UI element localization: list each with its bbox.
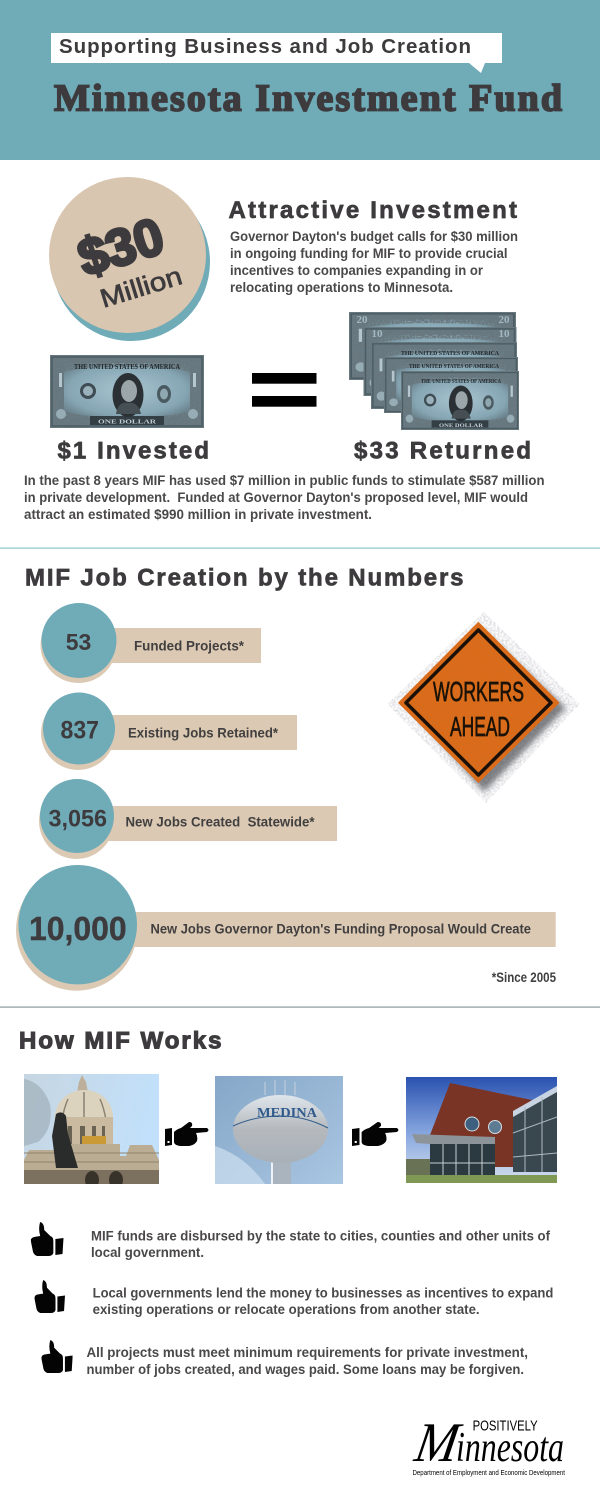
text block: budget call: in ongoing funding for MIF to provide crucial <box>230 245 508 261</box>
header banner <box>0 0 600 160</box>
text block: past 8 years: In the past 8 years MIF has used $7 million in public funds to stimulate $587 million <box>24 472 544 488</box>
icon: thumbs up 2 <box>34 1280 65 1313</box>
text block: step 3: number of jobs created, and wages paid. Some loans may be forgiven. <box>86 1361 524 1377</box>
heading: attractive investment: Attractive Investment <box>228 197 517 224</box>
stat: 837 jobs retained: 837 <box>60 716 99 744</box>
photo: state capitol <box>24 1074 159 1184</box>
text block: step 3 <box>86 1344 528 1377</box>
text block: step 1: local government. <box>91 1244 204 1260</box>
photo: business building <box>406 1077 557 1183</box>
arrow: pointing hand to capitol <box>165 1122 208 1146</box>
stat: 837 jobs retained <box>41 692 297 770</box>
stat: 3,056 new jobs: New Jobs Created Statewide* <box>126 814 315 830</box>
icon: single dollar bill: ONE DOLLAR <box>98 420 157 426</box>
text block: budget call: relocating operations to Minnesota. <box>230 279 453 295</box>
text block: step 1 <box>91 1228 550 1260</box>
heading: job creation: MIF Job Creation by the Numbers <box>25 564 464 592</box>
icon: workers ahead road sign: AHEAD <box>450 711 510 742</box>
stat: 53 funded projects: Funded Projects* <box>134 638 245 654</box>
icon: workers ahead road sign <box>387 612 580 803</box>
arrow: pointing hand to tower <box>352 1122 398 1146</box>
callout: $30 million circle: Million <box>96 260 186 314</box>
callout: $30 million circle <box>49 177 210 341</box>
icon: stack of dollar bills: THE UNITED STATES OF AMERICA <box>409 364 500 370</box>
stat: 53 funded projects <box>40 603 261 683</box>
icon: stack of dollar bills: THE UNITED STATES OF AMERICA <box>421 379 502 385</box>
stat: 10,000 proposed jobs: 10,000 <box>29 910 127 947</box>
icon: thumbs up 3 <box>41 1340 73 1373</box>
logo: Positively Minnesota: POSITIVELY <box>473 1419 538 1435</box>
text block: step 2: existing operations or relocate operations from another state. <box>93 1301 480 1317</box>
text block: past 8 years <box>24 472 544 522</box>
text block: past 8 years: in private development. Funded at Governor Dayton's proposed level, MIF would <box>24 489 528 505</box>
logo: Positively Minnesota: Department of Employment and Economic Development <box>412 1468 566 1477</box>
label: $33 returned: $33 Returned <box>354 438 531 464</box>
icon: workers ahead road sign: WORKERS <box>433 676 524 707</box>
icon: stack of dollar bills: ONE DOLLAR <box>439 424 484 429</box>
icon: single dollar bill: THE UNITED STATES OF AMERICA <box>74 363 180 371</box>
photo: Medina water tower <box>215 1076 343 1184</box>
text block: budget call: Governor Dayton's budget calls for $30 million <box>230 228 518 244</box>
text block: step 3: All projects must meet minimum requirements for private investment, <box>86 1344 528 1360</box>
icon: stack of dollar bills: 20 <box>498 314 510 326</box>
callout: $30 million circle: $30 <box>71 207 171 288</box>
logo: Positively Minnesota <box>410 1412 566 1477</box>
icon: stack of dollar bills: 10 <box>372 328 383 340</box>
title: Minnesota Investment Fund <box>54 78 562 120</box>
icon: stack of dollar bills <box>349 312 519 430</box>
label: $1 invested: $1 Invested <box>58 438 209 464</box>
icon: equals sign <box>252 373 316 407</box>
text block: budget call: incentives to companies expanding in or <box>230 262 484 278</box>
stat: 837 jobs retained: Existing Jobs Retained* <box>128 725 279 741</box>
photo: Medina water tower: MEDINA <box>257 1106 318 1121</box>
icon: stack of dollar bills: THE UNITED STATES OF AMERICA <box>401 350 499 357</box>
speech bubble subtitle <box>51 33 502 73</box>
text block: past 8 years: attract an estimated $990 million in private investment. <box>24 506 372 522</box>
text block: step 2: Local governments lend the money to businesses as incentives to expand <box>93 1285 553 1301</box>
logo: Positively Minnesota: innesota <box>456 1425 564 1471</box>
stat: 10,000 proposed jobs: New Jobs Governor Dayton's Funding Proposal Would Create <box>150 921 531 937</box>
speech bubble subtitle: Supporting Business and Job Creation <box>59 35 471 58</box>
text block: step 1: MIF funds are disbursed by the state to cities, counties and other units of <box>91 1228 550 1244</box>
icon: single dollar bill <box>50 355 204 428</box>
stat: 3,056 new jobs <box>39 779 337 859</box>
stat: 53 funded projects: 53 <box>66 629 91 655</box>
footnote: *Since 2005 <box>492 970 556 985</box>
icon: stack of dollar bills: 10 <box>498 328 510 340</box>
heading: how MIF works: How MIF Works <box>19 1028 222 1055</box>
stat: 10,000 proposed jobs <box>16 865 556 991</box>
text block: step 2 <box>93 1285 553 1317</box>
text block: budget call <box>230 228 518 295</box>
logo: Positively Minnesota: M <box>410 1412 466 1474</box>
icon: stack of dollar bills: 20 <box>356 314 368 326</box>
icon: thumbs up 1 <box>31 1222 64 1256</box>
stat: 3,056 new jobs: 3,056 <box>48 806 107 833</box>
